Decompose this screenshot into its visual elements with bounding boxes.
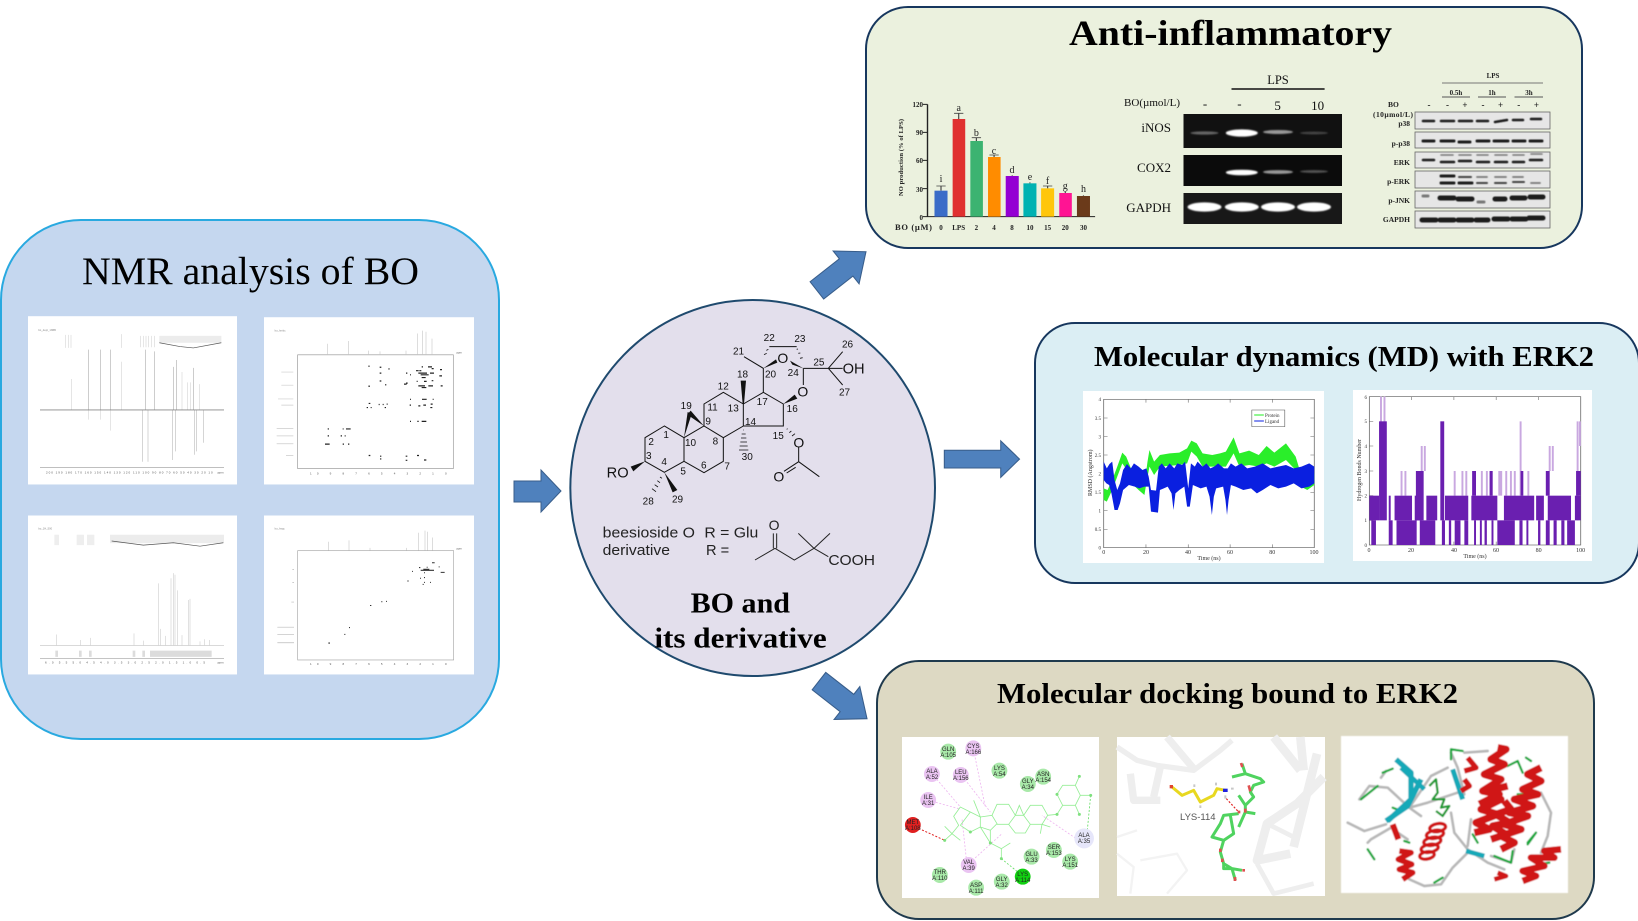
bar chart: hydrogen bonds number: 6 xyxy=(1364,396,1368,401)
diagram: 2D ligand interaction map xyxy=(902,737,1099,898)
western blot: MAPK panel: p-p38 xyxy=(1392,139,1410,148)
chemical structure: beesioside O skeleton: 11 xyxy=(707,403,718,414)
compound key: beesioside O and derivative xyxy=(603,517,875,569)
chemical structure: beesioside O skeleton: 7 xyxy=(724,462,730,473)
chemical structure: beesioside O skeleton: 17 xyxy=(757,397,768,408)
chemical structure: beesioside O skeleton: 24 xyxy=(788,368,799,379)
western blot: MAPK panel: ERK xyxy=(1394,158,1410,167)
diagram: 3D binding pose with LYS-114: LYS-114 xyxy=(1180,812,1216,823)
NMR spectrum: 2D HMBC: 10 9 8 7 6 5 4 3 2 1 0 xyxy=(310,471,447,475)
western blot: MAPK panel: - xyxy=(1428,100,1430,110)
diagram: 2D ligand interaction map: ILE xyxy=(924,795,933,801)
western blot: MAPK panel: 3h xyxy=(1525,89,1533,97)
heading: BO and its derivative xyxy=(654,589,827,654)
NMR spectrum: 13C DEPT: 200 190 180 170 160 150 140 130 120 110 100 90 80 70 60 50 40 30 20 10 xyxy=(46,470,213,474)
diagram: 2D ligand interaction map: MET xyxy=(906,820,919,826)
chemical structure: beesioside O skeleton: 14 xyxy=(745,417,757,428)
western blot: MAPK panel: + xyxy=(1498,100,1503,110)
bar chart: hydrogen bonds number: Hydrogen Bonds Number xyxy=(1357,439,1363,501)
compound key: beesioside O and derivative: derivative xyxy=(603,543,670,559)
bar chart: hydrogen bonds number: 80 xyxy=(1536,548,1542,554)
bar chart: NO production: 2 xyxy=(975,224,979,232)
line chart: RMSD: 0 xyxy=(1098,546,1102,552)
chemical structure: beesioside O skeleton: 10 xyxy=(685,438,697,449)
chemical structure: beesioside O skeleton xyxy=(607,333,865,507)
diagram: 2D ligand interaction map: A:35 xyxy=(1078,839,1091,845)
chemical structure: beesioside O skeleton: 12 xyxy=(718,381,729,392)
diagram: 2D ligand interaction map: ALA xyxy=(926,769,938,775)
diagram: 2D ligand interaction map: A:154 xyxy=(1035,778,1052,784)
bar chart: NO production: 90 xyxy=(916,129,924,137)
western blot: MAPK panel: - xyxy=(1517,100,1520,110)
bar chart: NO production: e xyxy=(1028,172,1033,183)
bar chart: NO production: 8 xyxy=(1010,224,1014,232)
NMR spectrum: 13C DEPT: ppm xyxy=(218,470,224,474)
diagram: 2D ligand interaction map: A:52 xyxy=(926,775,939,781)
bar chart: hydrogen bonds number: 3 xyxy=(1364,470,1368,475)
chemical structure: beesioside O skeleton: O xyxy=(777,350,788,366)
line chart: RMSD: 0.5 xyxy=(1095,528,1102,533)
bar chart: NO production: 10 xyxy=(1026,224,1034,232)
chemical structure: beesioside O skeleton: 21 xyxy=(733,347,745,358)
line chart: RMSD: Protein xyxy=(1265,414,1280,419)
chemical structure: beesioside O skeleton: 9 xyxy=(705,416,711,427)
line chart: RMSD: 80 xyxy=(1269,550,1275,556)
compound key: beesioside O and derivative: R = Glu xyxy=(704,525,758,541)
diagram: 2D ligand interaction map: VAL xyxy=(963,860,975,866)
bar chart: NO production: a xyxy=(956,103,961,114)
line chart: RMSD: 1 xyxy=(1098,510,1102,514)
diagram: 2D ligand interaction map: GLY xyxy=(996,877,1007,883)
diagram: 2D ligand interaction map: A:166 xyxy=(966,750,982,756)
bar chart: NO production: 120 xyxy=(912,101,924,109)
line chart: RMSD: 3.5 xyxy=(1095,417,1102,422)
western blot: MAPK panel: (10µmol/L) xyxy=(1373,110,1414,119)
western blot: MAPK panel: GAPDH xyxy=(1383,215,1410,224)
western blot: MAPK panel: - xyxy=(1482,100,1484,110)
line chart: RMSD: 20 xyxy=(1143,550,1149,556)
arrow: compound to anti-inflammatory xyxy=(810,251,866,299)
bar chart: hydrogen bonds number: 20 xyxy=(1408,548,1414,554)
bar chart: NO production: b xyxy=(974,128,979,139)
chemical structure: beesioside O skeleton: 15 xyxy=(773,431,784,442)
chemical structure: beesioside O skeleton: 8 xyxy=(713,436,719,447)
chemical structure: beesioside O skeleton: 3 xyxy=(646,451,652,462)
diagram: 2D ligand interaction map: A:114 xyxy=(1015,878,1031,884)
diagram: 2D ligand interaction map: ALA xyxy=(1078,833,1090,839)
NMR spectrum: 2D HSQC: ppm xyxy=(457,548,463,551)
line chart: RMSD: 60 xyxy=(1227,550,1233,556)
panel: Anti-inflammatory xyxy=(866,7,1582,248)
bar chart: hydrogen bonds number: 40 xyxy=(1451,548,1457,554)
gel: iNOS, COX2, GAPDH: 10 xyxy=(1311,98,1324,113)
panel: Molecular dynamics with ERK2 xyxy=(1035,323,1638,583)
western blot: MAPK panel: p38 xyxy=(1398,119,1410,128)
panel: Molecular docking bound to ERK2 xyxy=(877,661,1594,919)
diagram: 2D ligand interaction map: A:108 xyxy=(905,826,921,832)
diagram: ERK2 protein ribbon xyxy=(1341,736,1568,893)
chemical structure: beesioside O skeleton: 2 xyxy=(648,437,654,448)
bar chart: NO production: g xyxy=(1063,181,1068,192)
diagram: 2D ligand interaction map: LYS xyxy=(1065,857,1076,863)
diagram: 3D binding pose with LYS-114 xyxy=(1117,737,1325,896)
bar chart: hydrogen bonds number: 1 xyxy=(1364,519,1368,524)
chemical structure: beesioside O skeleton: 5 xyxy=(680,466,686,477)
line chart: RMSD: 40 xyxy=(1185,550,1191,556)
chemical structure: beesioside O skeleton: 23 xyxy=(794,334,806,345)
bar chart: hydrogen bonds number: Time (ns) xyxy=(1463,553,1487,560)
chemical structure: beesioside O skeleton: 28 xyxy=(643,496,654,507)
bar chart: NO production: BO (µM) xyxy=(895,222,932,232)
compound key: beesioside O and derivative: beesioside O xyxy=(603,525,695,541)
gel: iNOS, COX2, GAPDH: - xyxy=(1203,96,1207,111)
diagram: 2D ligand interaction map: A:110 xyxy=(932,876,948,882)
western blot: MAPK panel: 1h xyxy=(1488,89,1496,97)
diagram: 2D ligand interaction map: A:153 xyxy=(1046,851,1062,857)
bar chart: NO production: 30 xyxy=(1080,224,1088,232)
diagram: 2D ligand interaction map: SER xyxy=(1048,845,1061,851)
heading: Anti-inflammatory: Anti-inflammatory xyxy=(1069,13,1392,53)
heading: Molecular docking bound to ERK2: Molecular docking bound to ERK2 xyxy=(997,679,1458,710)
bar chart: hydrogen bonds number: 0 xyxy=(1368,548,1370,554)
compound key: beesioside O and derivative: COOH xyxy=(828,553,875,569)
panel: NMR analysis of BO xyxy=(1,220,499,739)
diagram: 2D ligand interaction map: GLY xyxy=(1022,779,1034,785)
NMR spectrum: 13C DEPT xyxy=(28,316,237,484)
heading: BO and its derivative: its derivative xyxy=(654,623,827,654)
bar chart: NO production xyxy=(895,101,1095,232)
western blot: MAPK panel: LPS xyxy=(1487,72,1500,80)
bar chart: NO production: 30 xyxy=(916,186,924,194)
bar chart: hydrogen bonds number: 100 xyxy=(1576,548,1585,554)
chemical structure: beesioside O skeleton: 4 xyxy=(661,457,667,468)
diagram: 2D ligand interaction map: GLN xyxy=(942,747,954,753)
chemical structure: beesioside O skeleton: OH xyxy=(843,362,865,378)
gel: iNOS, COX2, GAPDH: iNOS xyxy=(1141,120,1171,135)
bar chart: hydrogen bonds number xyxy=(1353,390,1592,561)
NMR spectrum: 1H: 6.0 5.5 5.0 4.5 4.0 3.5 3.0 2.5 2.0 1.5 1.0 0.5 xyxy=(45,660,205,664)
gel: iNOS, COX2, GAPDH: GAPDH xyxy=(1126,200,1171,215)
diagram: 2D ligand interaction map: A:31 xyxy=(922,801,935,807)
heading: NMR analysis of BO: NMR analysis of BO xyxy=(82,250,419,293)
line chart: RMSD: 1.5 xyxy=(1095,491,1102,496)
chemical structure: beesioside O skeleton: 26 xyxy=(842,339,854,350)
diagram: 2D ligand interaction map: A:54 xyxy=(993,772,1006,778)
arrow: compound to molecular dynamics xyxy=(944,441,1020,477)
chemical structure: beesioside O skeleton: 13 xyxy=(728,404,739,415)
compound key: beesioside O and derivative: O xyxy=(769,517,780,533)
chemical structure: beesioside O skeleton: O xyxy=(797,383,808,399)
chemical structure: beesioside O skeleton: 18 xyxy=(737,369,749,380)
compound key: beesioside O and derivative: R = xyxy=(706,543,729,559)
bar chart: NO production: LPS xyxy=(952,224,965,232)
western blot: MAPK panel: p-JNK xyxy=(1388,196,1410,205)
diagram: 2D ligand interaction map: ASN xyxy=(1037,772,1049,778)
bar chart: NO production: d xyxy=(1010,165,1014,176)
diagram: 2D ligand interaction map: A:34 xyxy=(1022,785,1035,791)
arrow: compound to molecular docking xyxy=(812,672,867,719)
line chart: RMSD: 3 xyxy=(1098,436,1102,440)
NMR spectrum: 2D HSQC: 10 9 8 7 6 5 4 3 2 1 0 xyxy=(310,662,447,666)
line chart: RMSD: 4 xyxy=(1098,398,1102,403)
NMR spectrum: 1H xyxy=(28,515,237,674)
western blot: MAPK panel: + xyxy=(1462,100,1468,110)
line chart: RMSD: RMSD (Angstrom) xyxy=(1087,449,1094,496)
gel: iNOS, COX2, GAPDH xyxy=(1124,73,1342,224)
diagram: 2D ligand interaction map: ASP xyxy=(970,883,982,889)
western blot: MAPK panel: BO xyxy=(1388,100,1399,109)
chemical structure: beesioside O skeleton: O xyxy=(773,468,784,484)
bar chart: NO production: i xyxy=(940,174,943,185)
bar chart: NO production: f xyxy=(1046,176,1050,187)
diagram: 2D ligand interaction map: LYS xyxy=(994,766,1005,772)
western blot: MAPK panel: 0.5h xyxy=(1450,89,1462,97)
bar chart: hydrogen bonds number: 2 xyxy=(1364,494,1368,500)
chemical structure: beesioside O skeleton: 29 xyxy=(672,495,684,506)
chemical structure: beesioside O skeleton: O xyxy=(793,435,804,451)
diagram: 2D ligand interaction map: LYS xyxy=(1017,872,1028,878)
bar chart: hydrogen bonds number: 60 xyxy=(1493,548,1499,554)
line chart: RMSD xyxy=(1083,391,1324,563)
chemical structure: beesioside O skeleton: 30 xyxy=(742,452,753,463)
diagram: 2D ligand interaction map: A:105 xyxy=(940,753,957,759)
line chart: RMSD: 2 xyxy=(1098,472,1102,478)
western blot: MAPK panel: - xyxy=(1446,100,1449,110)
bar chart: NO production: 0 xyxy=(920,214,924,222)
diagram: 2D ligand interaction map: A:32 xyxy=(996,883,1009,889)
gel: iNOS, COX2, GAPDH: - xyxy=(1237,96,1242,111)
bar chart: NO production: NO production (% of LPS) xyxy=(898,119,905,196)
chemical structure: beesioside O skeleton: 27 xyxy=(839,388,851,399)
bar chart: hydrogen bonds number: 0 xyxy=(1364,544,1368,549)
diagram: 2D ligand interaction map: A:39 xyxy=(963,866,976,872)
bar chart: hydrogen bonds number: 5 xyxy=(1364,420,1368,425)
chemical structure: beesioside O skeleton: 25 xyxy=(813,357,825,368)
chemical structure: beesioside O skeleton: 19 xyxy=(681,401,692,412)
diagram: 2D ligand interaction map: A:151 xyxy=(1062,863,1079,869)
NMR spectrum: 13C DEPT: bo_dept_13BB xyxy=(38,328,56,332)
western blot: MAPK panel: p-ERK xyxy=(1387,177,1410,186)
diagram: 2D ligand interaction map: THR xyxy=(934,870,947,876)
panel: BO and its derivative xyxy=(570,300,935,676)
bar chart: NO production: 15 xyxy=(1044,224,1052,232)
line chart: RMSD: Time (ns) xyxy=(1197,555,1221,562)
chemical structure: beesioside O skeleton: 20 xyxy=(765,369,777,380)
arrow: NMR to compound xyxy=(514,470,561,512)
NMR spectrum: 1H: ppm xyxy=(218,660,224,664)
bar chart: hydrogen bonds number: 4 xyxy=(1364,445,1368,450)
NMR spectrum: 1H: bo_1H_500 xyxy=(38,526,53,530)
bar chart: NO production: 4 xyxy=(992,224,996,232)
heading: BO and its derivative: BO and xyxy=(691,589,790,620)
gel: iNOS, COX2, GAPDH: 5 xyxy=(1274,98,1281,113)
NMR spectrum: 2D HSQC xyxy=(264,515,474,674)
western blot: MAPK panel xyxy=(1373,72,1550,228)
chemical structure: beesioside O skeleton: 16 xyxy=(787,404,798,415)
western blot: MAPK panel: + xyxy=(1534,100,1539,110)
NMR spectrum: 2D HMBC: bo_hmbc xyxy=(275,329,286,333)
chemical structure: beesioside O skeleton: 6 xyxy=(701,460,707,471)
diagram: 2D ligand interaction map: GLU xyxy=(1025,852,1038,858)
bar chart: NO production: c xyxy=(992,146,997,157)
diagram: 2D ligand interaction map: A:156 xyxy=(953,776,969,782)
chemical structure: beesioside O skeleton: 22 xyxy=(764,333,775,344)
NMR spectrum: 2D HSQC: bo_hsqc xyxy=(275,526,285,530)
heading: Molecular dynamics (MD) with ERK2: Molecular dynamics (MD) with ERK2 xyxy=(1094,341,1594,373)
line chart: RMSD: 0 xyxy=(1102,550,1105,556)
bar chart: NO production: h xyxy=(1081,184,1086,195)
chemical structure: beesioside O skeleton: RO xyxy=(607,465,629,481)
line chart: RMSD: Ligand xyxy=(1265,420,1280,425)
line chart: RMSD: 100 xyxy=(1310,550,1318,556)
bar chart: NO production: 60 xyxy=(916,157,924,165)
bar chart: NO production: 20 xyxy=(1062,224,1069,232)
diagram: 2D ligand interaction map: A:33 xyxy=(1025,858,1038,864)
bar chart: NO production: 0 xyxy=(939,224,943,232)
gel: iNOS, COX2, GAPDH: BO(µmol/L) xyxy=(1124,97,1180,109)
gel: iNOS, COX2, GAPDH: COX2 xyxy=(1137,160,1171,175)
diagram: 2D ligand interaction map: CYS xyxy=(967,744,980,750)
line chart: RMSD: 2.5 xyxy=(1095,454,1102,459)
NMR spectrum: 2D HMBC xyxy=(264,317,474,484)
NMR spectrum: 2D HMBC: ppm xyxy=(457,351,463,354)
diagram: 2D ligand interaction map: LEU xyxy=(955,770,967,776)
diagram: 2D ligand interaction map: A:111 xyxy=(969,889,984,895)
gel: iNOS, COX2, GAPDH: LPS xyxy=(1267,73,1289,87)
chemical structure: beesioside O skeleton: 1 xyxy=(663,430,669,441)
